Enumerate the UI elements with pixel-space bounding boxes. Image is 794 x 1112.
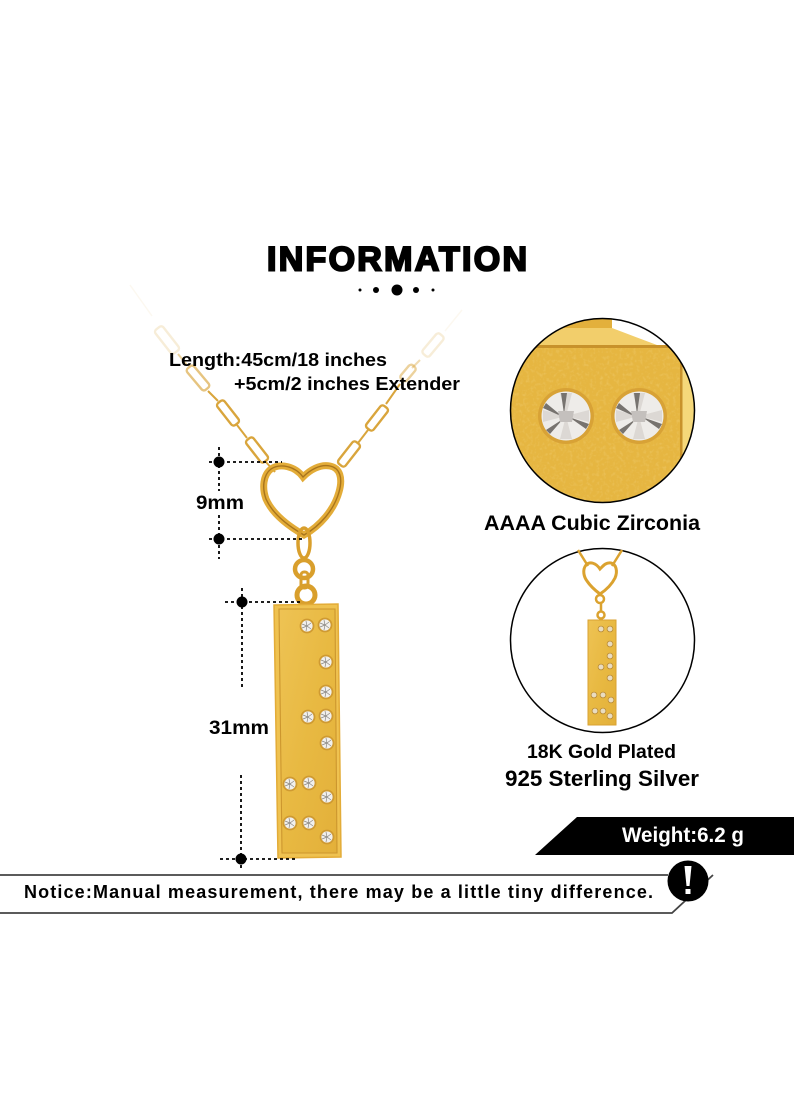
title: INFORMATION — [267, 240, 527, 278]
material caption — [505, 742, 699, 791]
thumbnail chain and heart — [578, 550, 622, 618]
pendant bar — [274, 604, 341, 858]
title dots — [358, 284, 434, 296]
left chain — [130, 285, 275, 472]
braille stones — [283, 618, 334, 844]
length label: Length:45cm/18 inches — [169, 350, 387, 370]
dimension: 31mm: 31mm — [209, 718, 269, 739]
necklace chain — [130, 285, 462, 472]
connecting rings — [295, 528, 315, 604]
circle: full pendant thumbnail — [510, 548, 694, 732]
weight banner: Weight:6.2 g — [622, 824, 744, 847]
length label — [169, 350, 460, 394]
icon: exclamation — [668, 860, 708, 902]
length label: +5cm/2 inches Extender — [234, 374, 460, 394]
notice bar: Notice:Manual measurement, there may be a little tiny difference. — [24, 882, 653, 902]
thumbnail bar — [588, 620, 616, 725]
dimension: 9mm — [196, 447, 305, 559]
circle: zirconia close-up — [510, 318, 696, 507]
notice bar — [0, 860, 713, 913]
right chain — [337, 310, 462, 468]
material caption: 925 Sterling Silver — [505, 766, 699, 791]
weight banner — [535, 817, 794, 855]
dimension: 9mm: 9mm — [196, 493, 244, 514]
dimension: 31mm — [209, 588, 300, 871]
material caption: 18K Gold Plated — [527, 742, 676, 763]
zirconia caption: AAAA Cubic Zirconia — [484, 512, 700, 535]
heart charm — [264, 466, 341, 535]
zirconia stones — [538, 388, 667, 444]
